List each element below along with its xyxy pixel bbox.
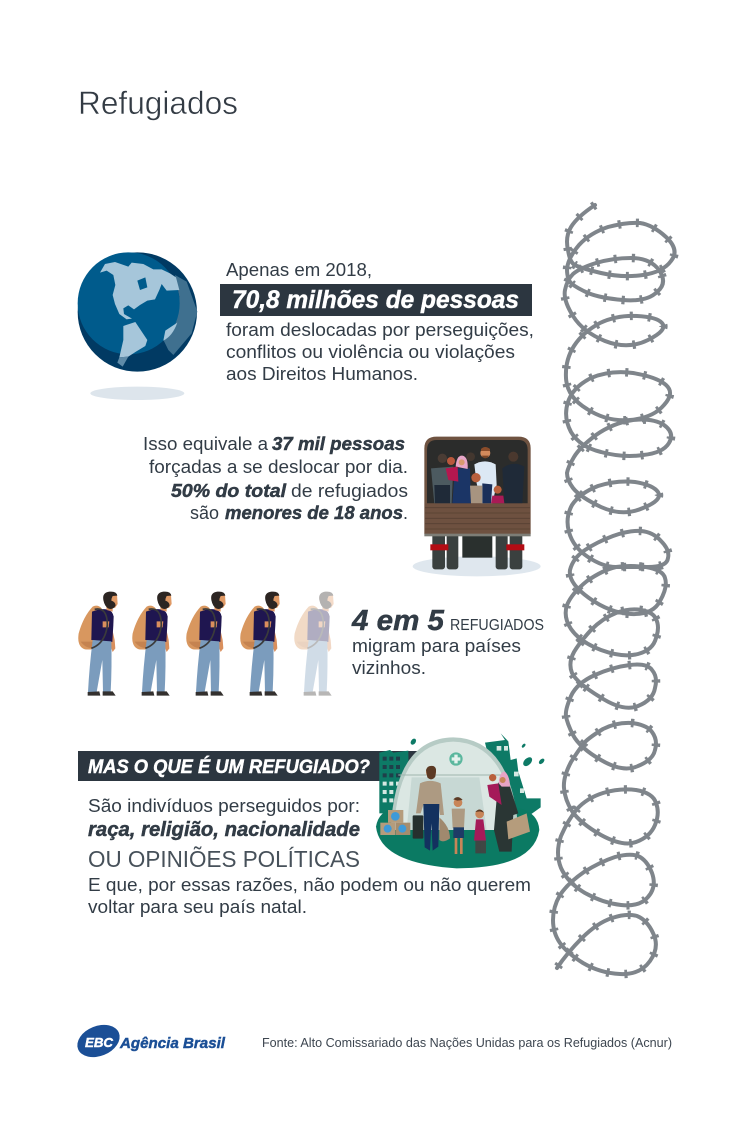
logo: EBC Agência Brasil — [72, 1019, 226, 1063]
text block: definition: voltar para seu país natal. — [88, 897, 307, 917]
icon: barbed wire — [553, 205, 675, 974]
text block: daily displacement: 50% do total — [171, 481, 287, 501]
text block: daily displacement: forçadas a se deslocar por dia. — [149, 457, 408, 477]
title: Refugiados — [78, 85, 238, 121]
logo: EBC Agência Brasil: EBC — [85, 1035, 114, 1050]
text block: intro: Apenas em 2018, — [226, 260, 372, 280]
text block: definition — [88, 796, 531, 917]
text block: daily displacement: . — [403, 503, 408, 523]
text block: definition: E que, por essas razões, não podem ou não querem — [88, 875, 531, 895]
person 3 — [186, 592, 226, 696]
text block: 4 in 5: 4 em 5 — [351, 605, 445, 637]
text block: daily displacement: 37 mil pessoas — [272, 434, 405, 454]
text block: daily displacement: são — [190, 503, 219, 523]
left building — [379, 750, 409, 813]
text block: intro — [220, 260, 534, 384]
text block: 4 in 5: migram para países — [352, 636, 521, 656]
ground — [376, 808, 539, 868]
illustration: refugee family at camp — [376, 733, 545, 868]
icon: truck with refugees — [413, 437, 541, 576]
supply boxes — [380, 810, 410, 835]
text block: 4 in 5: REFUGIADOS — [450, 617, 544, 634]
tent — [391, 737, 518, 830]
heading bar: what is a refugee: MAS O QUE É UM REFUGIADO? — [88, 755, 370, 778]
text block: intro: conflitos ou violência ou violações — [226, 342, 515, 362]
icon: globe — [78, 252, 197, 400]
mother and child — [487, 772, 530, 852]
source note: Fonte: Alto Comissariado das Nações Unidas para os Refugiados (Acnur) — [262, 1036, 672, 1050]
text block: definition: OU OPINIÕES POLÍTICAS — [88, 845, 360, 872]
family — [446, 447, 504, 503]
father — [413, 766, 450, 851]
text block: daily displacement — [143, 434, 408, 523]
text block: 4 in 5 — [351, 605, 544, 678]
icon: medical cross — [449, 752, 463, 766]
text block: daily displacement: de refugiados — [291, 481, 408, 501]
girl — [474, 809, 486, 853]
text block: definition: raça, religião, nacionalidade — [88, 819, 360, 841]
person 5 faded — [294, 592, 334, 696]
person 1 — [78, 592, 118, 696]
pictogram: 4 of 5 refugees — [78, 592, 334, 696]
text block: intro: aos Direitos Humanos. — [226, 364, 418, 384]
highlight bar: 70,8 milhões de pessoas — [232, 286, 519, 314]
ruined building — [410, 733, 545, 817]
text block: daily displacement: menores de 18 anos — [225, 503, 403, 523]
person 4 — [240, 592, 280, 696]
text block: daily displacement: Isso equivale a — [143, 434, 269, 454]
text block: 4 in 5: vizinhos. — [352, 658, 426, 678]
background adults — [431, 452, 524, 503]
boy — [452, 797, 465, 854]
person 2 — [132, 592, 172, 696]
heading bar: what is a refugee — [78, 751, 418, 781]
text block: definition: São indivíduos perseguidos por: — [88, 796, 360, 816]
logo: EBC Agência Brasil: Agência Brasil — [119, 1035, 226, 1052]
text block: intro: foram deslocadas por perseguições, — [226, 320, 534, 340]
